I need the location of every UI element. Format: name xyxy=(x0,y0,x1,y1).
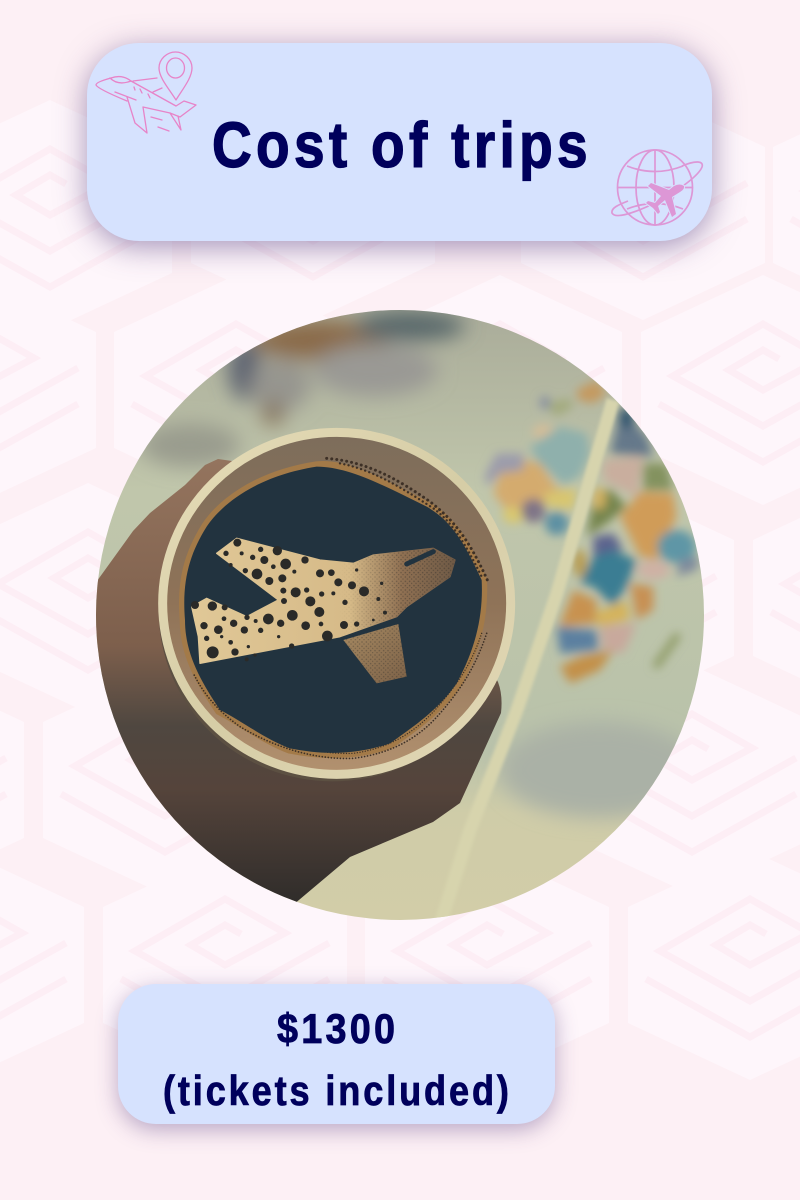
icon: plane and location pin xyxy=(96,52,196,133)
blurred map upper continent xyxy=(140,311,700,818)
plane window slit xyxy=(407,552,433,564)
title: Cost of trips xyxy=(212,109,592,181)
plane wing xyxy=(343,624,407,683)
icon: globe with orbiting plane xyxy=(612,150,702,225)
blurred map continents right xyxy=(485,380,700,683)
title card xyxy=(87,43,712,241)
price text: (tickets included) xyxy=(163,1069,512,1115)
wing stipple xyxy=(343,624,407,683)
hand xyxy=(90,459,502,905)
plane stipple xyxy=(346,548,454,634)
cup rim xyxy=(163,432,511,774)
photo: coffee cup with plane foam over a map xyxy=(96,310,704,920)
price card xyxy=(118,984,555,1124)
map fold strip xyxy=(440,400,613,925)
plane body xyxy=(192,538,455,663)
price text xyxy=(163,1006,512,1115)
coffee surface xyxy=(184,467,482,753)
coffee cup xyxy=(159,432,511,781)
cup interior xyxy=(163,433,510,773)
map background xyxy=(90,305,710,925)
foam bubbles xyxy=(193,458,487,758)
price text: $1300 xyxy=(277,1006,398,1052)
plane bubbles xyxy=(191,539,387,661)
cup wall xyxy=(159,622,402,781)
foam ring xyxy=(184,466,482,753)
foam plane xyxy=(191,538,455,683)
